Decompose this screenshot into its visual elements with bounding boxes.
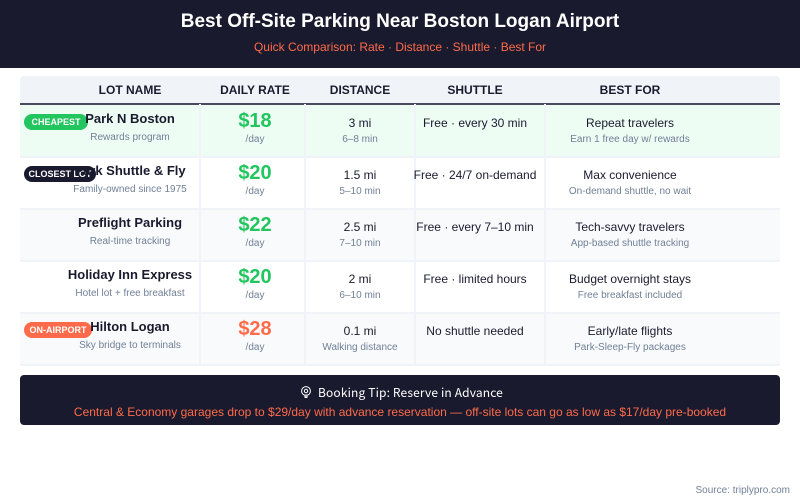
column heading: lot name: LOT NAME (99, 83, 161, 97)
price: $20 (238, 266, 272, 288)
title: Best Off-Site Parking Near Boston Logan Airport (181, 11, 619, 32)
lot name: Holiday Inn Express (68, 267, 192, 282)
best for: Early/late flights (588, 324, 672, 338)
shuttle: Free · limited hours (423, 272, 527, 286)
distance: 1.5 mi (344, 168, 376, 182)
best for note: Park-Sleep-Fly packages (574, 342, 686, 353)
price: $28 (238, 318, 272, 340)
row: Park N Boston (85, 110, 690, 145)
lot note: Rewards program (90, 132, 170, 143)
shuttle: Free · every 7–10 min (416, 220, 534, 234)
badge: closest lot (24, 166, 96, 182)
drive time: 7–10 min (339, 238, 381, 249)
price unit: /day (246, 134, 264, 145)
row: Park Shuttle & Fly (73, 162, 692, 197)
best for: Repeat travelers (586, 116, 674, 130)
lot note: Sky bridge to terminals (79, 340, 181, 351)
row: Holiday Inn Express (68, 266, 691, 301)
badge: cheapest: CHEAPEST (31, 117, 80, 127)
badge: cheapest (24, 114, 88, 130)
best for: Max convenience (583, 168, 677, 182)
lot note: Real-time tracking (90, 236, 170, 247)
best for: Tech-savvy travelers (575, 220, 685, 234)
row background: Preflight Parking (20, 210, 780, 262)
distance: 3 mi (349, 116, 371, 130)
table header (20, 76, 780, 105)
best for note: App-based shuttle tracking (571, 238, 689, 249)
tip body: Central & Economy garages drop to $29/day with advance reservation — off-site lots can go as low as $17/day pre-booked (74, 405, 726, 419)
lot name: Park N Boston (85, 111, 175, 126)
row: Preflight Parking (78, 214, 689, 249)
lot note: Family-owned since 1975 (73, 184, 187, 195)
distance: 2.5 mi (344, 220, 376, 234)
row background: Park Shuttle & Fly (20, 158, 780, 210)
column heading: daily rate: DAILY RATE (220, 83, 290, 97)
row: Hilton Logan (79, 318, 686, 353)
drive time: 5–10 min (339, 186, 381, 197)
drive time: 6–10 min (339, 290, 381, 301)
badge: on-airport: ON-AIRPORT (30, 325, 86, 335)
best for note: On-demand shuttle, no wait (569, 186, 691, 197)
lot name: Park Shuttle & Fly (74, 163, 186, 178)
price unit: /day (246, 238, 264, 249)
shuttle: Free · 24/7 on-demand (414, 168, 536, 182)
best for note: Earn 1 free day w/ rewards (570, 134, 690, 145)
tip heading: Booking Tip: Reserve in Advance (318, 384, 503, 401)
column heading: distance: DISTANCE (330, 83, 390, 97)
price unit: /day (246, 290, 264, 301)
icon: light bulb (301, 386, 311, 398)
lot name: Preflight Parking (78, 215, 182, 230)
lot note: Hotel lot + free breakfast (75, 288, 185, 299)
column heading: shuttle: SHUTTLE (447, 83, 503, 97)
distance: 2 mi (349, 272, 371, 286)
badge: closest lot: CLOSEST LOT (28, 169, 92, 179)
price: $18 (238, 110, 272, 132)
price: $20 (238, 162, 272, 184)
lot name: Hilton Logan (90, 319, 170, 334)
header banner (0, 0, 800, 68)
distance: 0.1 mi (344, 324, 376, 338)
best for note: Free breakfast included (578, 290, 682, 301)
badge: on-airport (24, 322, 92, 338)
subtitle: Quick Comparison: Rate · Distance · Shuttle · Best For (254, 40, 546, 54)
row background: Hilton Logan (20, 314, 780, 366)
walking note: Walking distance (322, 342, 398, 353)
shuttle: No shuttle needed (426, 324, 524, 338)
column heading: best for: BEST FOR (600, 83, 660, 97)
row background: Park N Boston (20, 105, 780, 158)
drive time: 6–8 min (342, 134, 378, 145)
price unit: /day (246, 186, 264, 197)
price unit: /day (246, 342, 264, 353)
price: $22 (238, 214, 272, 236)
best for: Budget overnight stays (569, 272, 691, 286)
booking tip panel (20, 375, 780, 425)
row background: Holiday Inn Express (20, 262, 780, 314)
shuttle: Free · every 30 min (423, 116, 527, 130)
source credit: Source: triplypro.com (696, 485, 790, 496)
